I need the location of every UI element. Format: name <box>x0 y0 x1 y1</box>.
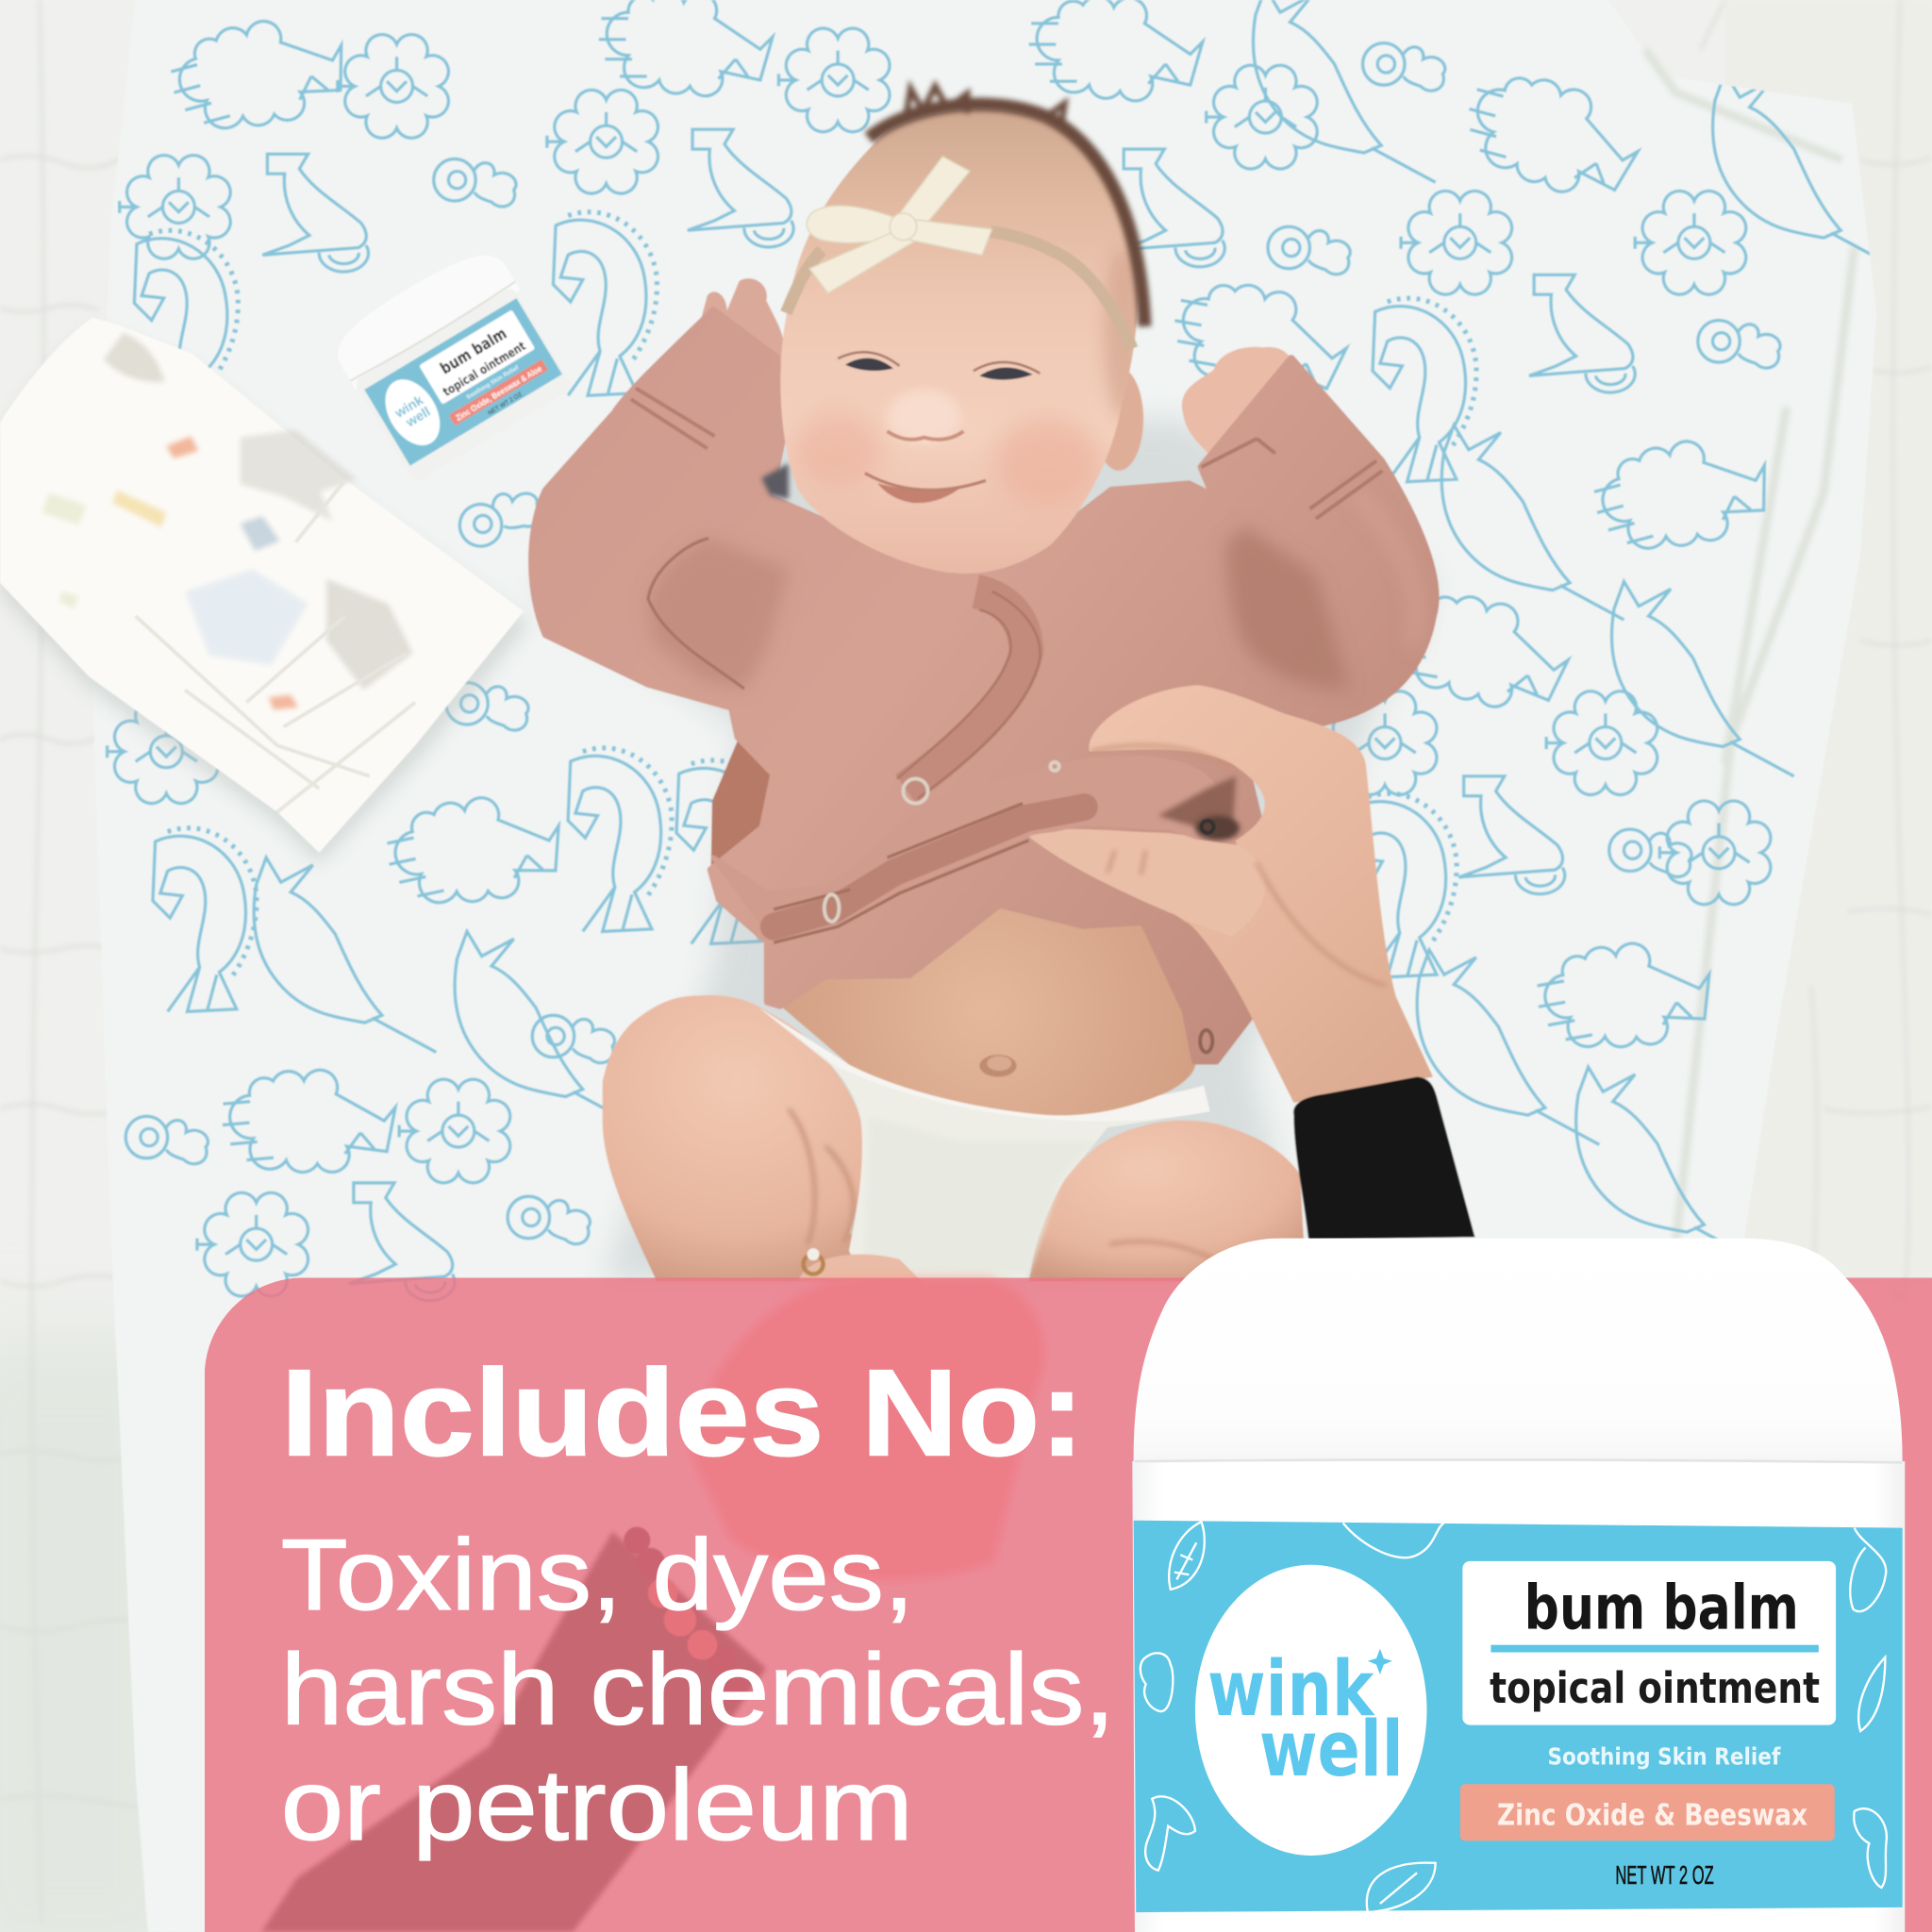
armpit shadow <box>761 463 789 499</box>
bow <box>807 157 991 293</box>
baby belly <box>780 905 1195 1115</box>
small jar on the blanket: well <box>403 405 433 431</box>
eyes <box>838 352 1040 380</box>
heading: Includes No: <box>281 1344 1084 1482</box>
jar lid <box>1134 1239 1903 1461</box>
baby <box>530 86 1474 1284</box>
headband <box>786 232 1132 349</box>
ingredient band <box>1460 1784 1835 1840</box>
baby legs <box>603 995 1306 1281</box>
small jar on the blanket: bum balm <box>437 325 510 378</box>
ingredient band: Zinc Oxide & Beeswax <box>1497 1798 1807 1832</box>
product name box <box>1462 1561 1836 1725</box>
product name box: bum balm <box>1524 1573 1799 1644</box>
small jar on the blanket <box>325 240 577 484</box>
small jar on the blanket: topical ointment <box>441 340 528 400</box>
text block: list of exclusions <box>281 1518 1115 1861</box>
second hand at the bottom <box>798 1255 924 1284</box>
product jar <box>1132 1239 1905 1932</box>
worn diaper <box>759 1008 1210 1281</box>
onesie <box>532 310 1436 1061</box>
diaper on the blanket <box>0 318 530 865</box>
nose <box>887 390 963 443</box>
cheeks <box>793 413 882 487</box>
jar body <box>1132 1461 1905 1932</box>
small jar on the blanket: Soothing Skin Relief <box>465 364 521 401</box>
net weight: NET WT 2 OZ <box>1615 1860 1714 1890</box>
onesie seams and folds <box>631 388 1382 689</box>
text block: list of exclusions: Toxins, dyes, <box>281 1518 914 1631</box>
label leaf doodles <box>1141 1522 1887 1912</box>
panel: includes no <box>205 1277 1932 1932</box>
small jar on the blanket: Zinc Oxide, Beeswax & Aloe <box>454 364 543 423</box>
blanket doodle pattern <box>108 0 1895 1301</box>
wrap neckline band <box>897 591 1041 798</box>
jar label <box>1134 1521 1903 1912</box>
navel <box>979 1055 1017 1077</box>
small jar on the blanket: wink <box>391 392 426 422</box>
diaper wrinkles and print <box>42 333 413 709</box>
inner back of onesie <box>711 737 774 870</box>
adult hand <box>1029 685 1433 1103</box>
soft shadow under baby <box>530 419 1436 1281</box>
ring <box>804 1248 823 1274</box>
left hand raised <box>692 278 787 425</box>
mouth <box>865 474 986 503</box>
baby head <box>780 86 1144 574</box>
brand logo: wink <box>1208 1645 1375 1734</box>
brand logo <box>1195 1565 1426 1856</box>
text block: list of exclusions: harsh chemicals, <box>281 1632 1115 1745</box>
tagline: Soothing Skin Relief <box>1547 1742 1781 1770</box>
right fist <box>1182 347 1291 466</box>
product name box: topical ointment <box>1490 1663 1820 1713</box>
blanket fold shadows <box>1645 49 1855 1244</box>
hair <box>869 86 1144 326</box>
black sleeve <box>1293 1077 1474 1240</box>
sleeve shading <box>648 492 1417 689</box>
brand logo: well <box>1259 1706 1404 1794</box>
hand and forearm under the panel <box>261 1277 1044 1932</box>
adult hand creases <box>1091 745 1386 986</box>
text block: list of exclusions: or petroleum <box>281 1748 913 1861</box>
lifted onesie flap <box>713 758 1240 942</box>
adult thumb <box>1029 832 1265 937</box>
onesie snaps <box>824 762 1214 1052</box>
small jar on the blanket: NET WT 2 OZ <box>487 391 524 417</box>
